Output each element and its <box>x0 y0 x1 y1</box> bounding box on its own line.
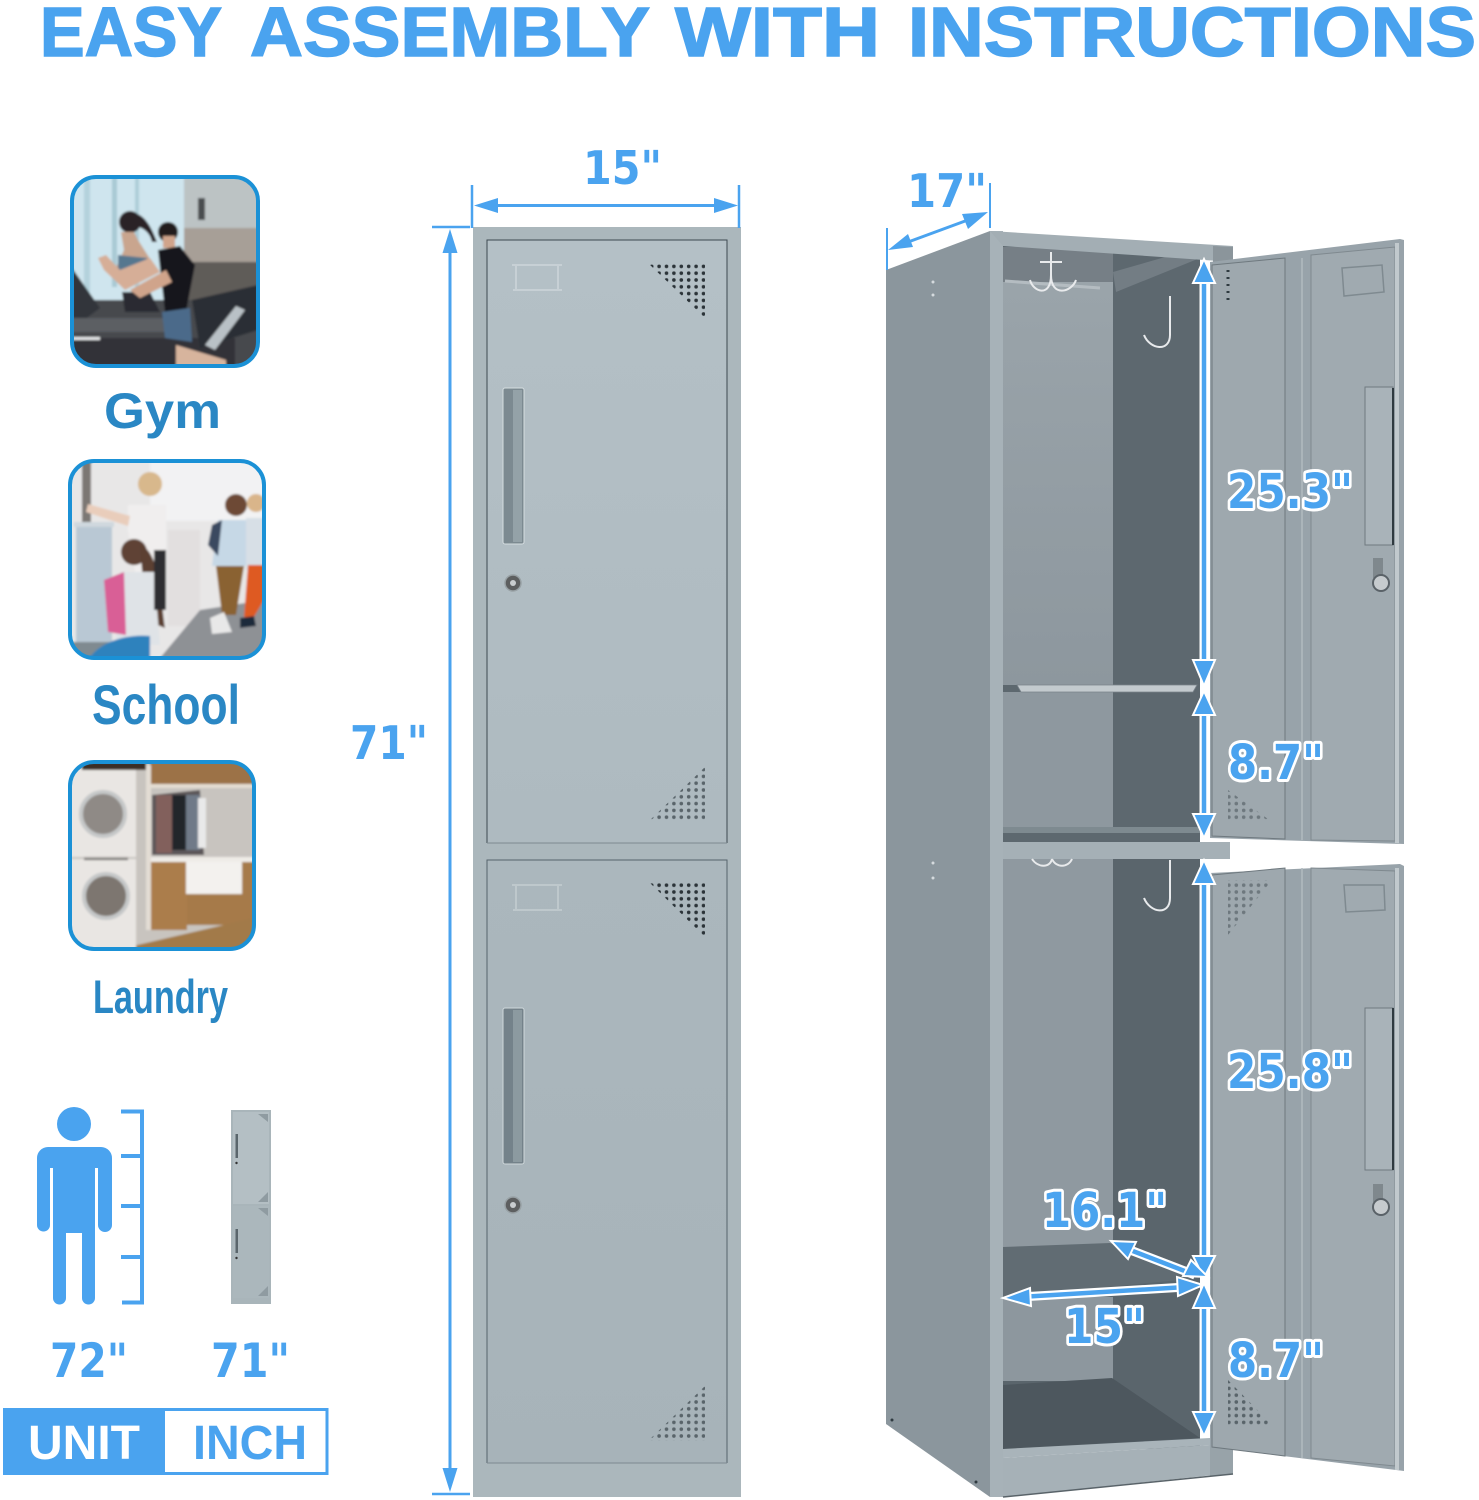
dimension: depth 17 <box>887 164 990 270</box>
front left post <box>990 231 1003 1497</box>
label: Laundry: Laundry <box>93 970 228 1023</box>
label: person height: 72" <box>50 1334 128 1389</box>
boy in red trousers <box>240 494 265 628</box>
panel: usage scenarios <box>70 177 265 1023</box>
photo: gym <box>72 177 258 366</box>
dimension: upper shelf height <box>1193 691 1324 838</box>
unit badge: UNIT <box>28 1417 140 1470</box>
icon: mini locker <box>231 1110 271 1304</box>
standing girl <box>84 471 164 526</box>
dimension: upper shelf height: 8.7" <box>1228 735 1324 791</box>
bottom door <box>487 860 727 1463</box>
dimension: upper hanging height <box>1193 259 1353 686</box>
dimension: lower hanging height: 25.8" <box>1227 1044 1353 1100</box>
dimension: interior depth: 16.1" <box>1042 1183 1167 1239</box>
dimension: depth 17: 17" <box>907 164 987 218</box>
dimension: front height <box>350 227 470 1494</box>
dimension: front width: 15" <box>583 141 662 195</box>
dimension: lower hanging height <box>1193 860 1353 1278</box>
divider bar <box>1002 842 1230 859</box>
height scale <box>121 1112 142 1302</box>
top door <box>487 240 727 843</box>
unit badge <box>3 1408 327 1475</box>
label: locker height: 71" <box>211 1334 290 1389</box>
panel: open locker <box>886 231 1404 1497</box>
boy <box>208 494 250 634</box>
dimension: upper hanging height: 25.3" <box>1227 464 1353 520</box>
dimension: front width <box>472 141 739 228</box>
shelf <box>1017 685 1197 692</box>
label: Gym: Gym <box>104 383 221 439</box>
top open door <box>1210 239 1404 844</box>
bottom open door <box>1210 864 1404 1471</box>
top bar <box>990 231 1233 262</box>
side panel <box>886 231 990 1497</box>
man runner <box>130 222 226 366</box>
dimension: interior depth <box>1042 1183 1208 1277</box>
icon: person <box>37 1107 112 1305</box>
side rivets <box>890 280 978 1484</box>
photo: school <box>70 461 265 660</box>
locker frame <box>473 227 741 1497</box>
dimension: interior width: 15" <box>1064 1299 1145 1355</box>
dimension: lower shelf height: 8.7" <box>1228 1333 1324 1389</box>
hook set <box>1030 252 1170 347</box>
lower compartment <box>1003 859 1200 1449</box>
woman runner <box>98 211 160 312</box>
title <box>40 0 1476 71</box>
panel: height comparison <box>3 1107 327 1475</box>
dimension: lower shelf height <box>1193 1283 1324 1436</box>
label: School: School <box>92 673 240 736</box>
dimension: interior width <box>1003 1277 1203 1355</box>
upper compartment <box>1003 245 1200 845</box>
crouching girl <box>88 539 166 660</box>
dimension: front height: 71" <box>350 716 428 770</box>
unit badge: INCH <box>193 1417 307 1470</box>
base <box>1003 1438 1233 1497</box>
panel: front view locker <box>473 227 741 1497</box>
photo: laundry <box>70 762 254 949</box>
